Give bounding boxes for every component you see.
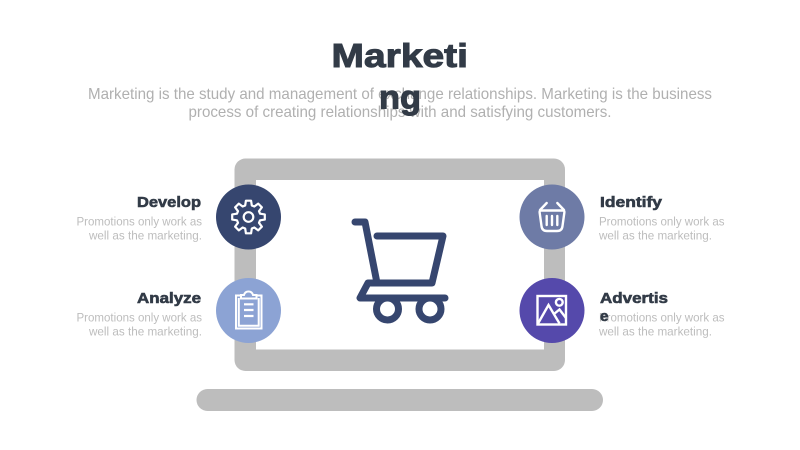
title: Marketi: [332, 37, 468, 74]
icon: basket: [520, 184, 584, 250]
item: Analyze: well as the marketing.: [88, 324, 202, 338]
subtitle: Marketing is the study and management of exchange relationships. Marketing is the business: [88, 86, 712, 103]
icon: gear: [216, 184, 281, 250]
subtitle: process of creating relationships with and satisfying customers.: [188, 104, 612, 121]
item: Develop: [76, 184, 281, 250]
item: Advertise: [520, 278, 724, 343]
item: Analyze: Analyze: [137, 290, 201, 307]
item: Analyze: Promotions only work as: [76, 310, 202, 324]
subtitle: [88, 86, 712, 121]
item: Advertise: e: [600, 308, 608, 325]
item: Analyze: [76, 278, 281, 343]
laptop screen frame: [234, 158, 565, 371]
icon: shopping cart: [355, 222, 445, 320]
icon: clipboard: [216, 278, 281, 343]
title: ng: [379, 79, 421, 116]
title: [332, 37, 468, 116]
item: Identify: [520, 184, 724, 250]
item: Develop: well as the marketing.: [88, 228, 202, 242]
item: Advertise: Advertis: [600, 290, 668, 307]
item: Advertise: Promotions only work as: [599, 310, 724, 324]
item: Identify: Promotions only work as: [599, 214, 724, 228]
icon: picture: [520, 278, 584, 343]
laptop base: [196, 389, 603, 411]
item: Develop: Develop: [137, 194, 201, 211]
item: Identify: Identify: [600, 194, 663, 211]
item: Advertise: well as the marketing.: [598, 324, 712, 338]
laptop illustration: [196, 158, 603, 411]
item: Develop: Promotions only work as: [76, 214, 202, 228]
item: Identify: well as the marketing.: [598, 228, 712, 242]
